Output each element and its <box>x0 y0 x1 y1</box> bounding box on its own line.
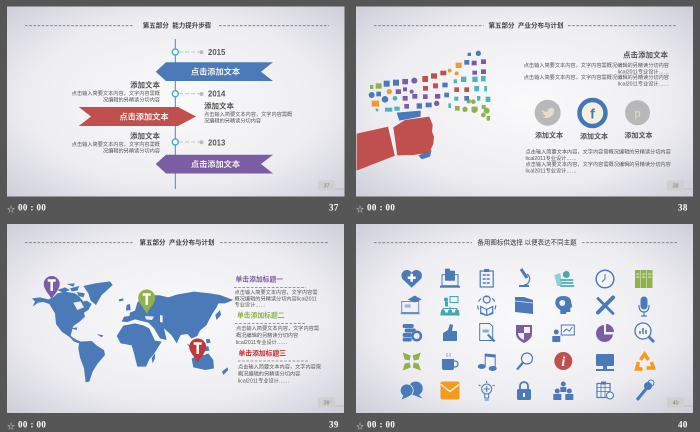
panel: slide 40 icons <box>356 224 693 413</box>
footer: slide 39: 00 : 00 <box>18 420 46 430</box>
footer: slide 37: 37 <box>329 202 339 212</box>
icon: graduation laptop <box>401 296 422 314</box>
social labels: 添加文本 <box>535 130 563 140</box>
footer: slide 39: ☆ <box>7 422 15 431</box>
icon: key <box>637 380 654 400</box>
footer: slide 38 <box>356 202 688 214</box>
social labels: 添加文本 <box>624 130 652 140</box>
text block: middle right: 况编辑的另精读分切内容 <box>204 116 261 124</box>
ribbon: purple <box>156 155 273 174</box>
text block: bottom right: 点击输入简要文本内容，文字内容需概况编辑的另精读分切内容 <box>526 160 671 168</box>
legend item one: 单击添加标题一 <box>236 274 283 284</box>
icon: magnifier <box>517 353 532 370</box>
icon: coins <box>403 324 422 342</box>
text block: upper left <box>72 80 160 104</box>
icon: heart <box>401 270 422 288</box>
map pin: green <box>138 290 155 314</box>
text block: middle right <box>204 100 292 124</box>
map pin: red <box>189 338 206 362</box>
legend item two: 点击输入简要文本内容，文字内容需 <box>236 324 319 332</box>
footer: slide 37: 00 : 00 <box>18 202 46 212</box>
legend item two: lical2011专业设计…… <box>236 338 287 346</box>
page number 37 <box>318 180 344 190</box>
year marker 2015: 2015 <box>208 48 226 57</box>
social labels <box>535 130 652 140</box>
text block: lower left: 添加文本 <box>130 130 160 140</box>
icon: pinterest circle: p <box>634 108 641 120</box>
icon: music note <box>478 354 497 371</box>
year marker 2014 <box>172 90 226 99</box>
icon: recycle <box>636 354 654 369</box>
ribbon: blue: 点击添加文本 <box>191 67 240 77</box>
text block: bottom right <box>526 148 671 174</box>
legend item three: 单击添加标题三 <box>238 348 286 358</box>
year marker 2014: 2014 <box>208 90 226 99</box>
text block: bottom right: lical2011专业设计…… <box>526 154 577 162</box>
page number 38 <box>667 180 693 190</box>
text block: lower left <box>72 130 160 154</box>
page number 37: 37 <box>323 184 330 190</box>
heading: slide 40: 备用图标供选择 以便表达不同主题 <box>477 238 577 246</box>
icon: mail <box>440 382 460 400</box>
text block: upper left: 添加文本 <box>130 80 160 90</box>
legend item one: 概况编辑的另精读分切内容lical2011 <box>234 294 317 302</box>
illustration: hand holding megaphone <box>357 111 434 171</box>
icon: monitor <box>596 354 614 371</box>
icon: org chart <box>440 296 460 316</box>
heading: slide 39: 第五部分 产业分布与计划 <box>139 238 215 246</box>
text block: middle right: 添加文本 <box>204 100 234 110</box>
icon: microphone <box>639 297 649 316</box>
world map <box>32 281 233 382</box>
timeline axis <box>174 39 176 189</box>
icon: folder <box>515 297 533 314</box>
page number 39 <box>318 398 344 408</box>
icon: clipboard <box>480 269 493 287</box>
icon: calendar <box>597 382 614 399</box>
text block: top right: 点击输入简要文本内容，文字内容需概况编辑的另精读分切内容 <box>524 73 669 81</box>
ribbon: red <box>79 107 196 126</box>
icon: tools <box>598 298 613 314</box>
footer: slide 40: 00 : 00 <box>367 420 395 430</box>
text block: top right: 点击输入简要文本内容，文字内容需概况编辑的另精读分切内容 <box>524 61 669 69</box>
icon: info <box>554 352 572 370</box>
ribbon: red: 点击添加文本 <box>119 112 169 122</box>
heading: slide 38: 第五部分 产业分布与计划 <box>488 20 564 30</box>
icon: info: i <box>561 355 565 370</box>
year marker 2013 <box>172 138 226 148</box>
footer: slide 40: ☆ <box>356 422 364 431</box>
icon: facebook circle: f <box>590 106 595 122</box>
icon: pinterest circle <box>625 100 650 125</box>
text block: upper left: 况编辑的另精读分切内容 <box>103 96 160 104</box>
legend item one: 点击输入简要文本内容，文字内容需 <box>234 288 318 296</box>
icon: clock <box>596 270 614 288</box>
text block: top right: 点击添加文本 <box>623 50 668 60</box>
text block: lower left: 点击输入简要文本内容，文字内容需概 <box>72 140 160 148</box>
text block: upper left: 点击输入简要文本内容，文字内容需概 <box>72 89 160 97</box>
footer: slide 38: 38 <box>678 202 688 212</box>
icon: chat bubbles <box>400 382 423 400</box>
ribbon: purple: 点击添加文本 <box>191 159 240 169</box>
footer: slide 38: 00 : 00 <box>367 202 395 212</box>
icon cloud from megaphone <box>369 51 490 121</box>
legend item two: 概况编辑的另精读分切内容 <box>236 331 298 339</box>
legend item two <box>235 310 319 346</box>
icon: head <box>555 296 572 314</box>
text block: bottom right: 点击输入简要文本内容，文字内容需概况编辑的另精读分切内容 <box>526 148 671 156</box>
icon: coffee cup <box>442 353 458 370</box>
icon: green arrows <box>403 352 421 370</box>
panel: slide 39 world map <box>7 224 344 413</box>
page number 40 <box>667 398 693 408</box>
icon: binders <box>635 270 652 288</box>
footer: slide 37: ☆ <box>7 205 15 214</box>
icon: people <box>553 382 573 400</box>
icon: books <box>554 271 574 286</box>
icon: pie chart <box>596 324 614 342</box>
footer: slide 39: 39 <box>329 420 339 430</box>
map pin: purple <box>44 276 60 299</box>
legend item three <box>238 348 321 384</box>
icon: laptop <box>440 269 460 288</box>
icon: thumbs up <box>443 324 457 341</box>
text block: lower left: 况编辑的另精读分切内容 <box>103 146 160 154</box>
footer: slide 40 <box>356 420 688 431</box>
panel: slide 38 megaphone <box>356 6 693 196</box>
legend item three: lical2011专业设计…… <box>238 376 289 384</box>
icon: document search <box>480 324 495 342</box>
page number 39: 39 <box>323 400 330 406</box>
footer: slide 39 <box>7 420 339 431</box>
icon: chart magnifier <box>635 323 654 342</box>
legend item one <box>234 274 318 308</box>
footer: slide 38: ☆ <box>356 205 364 214</box>
year marker 2013: 2013 <box>208 138 226 148</box>
text block: middle right: 点击输入简要文本内容，文字内容需概 <box>204 110 292 118</box>
icon: shield <box>516 325 532 343</box>
panel: slide 37 timeline <box>7 6 344 196</box>
icon: microscope <box>519 269 530 286</box>
legend item two: 单击添加标题二 <box>237 310 285 320</box>
legend item three: 概况编辑的另精读分切内容 <box>238 370 300 378</box>
legend item one: 专业设计…… <box>234 300 266 308</box>
page number 40: 40 <box>672 400 679 406</box>
social labels: 添加文本 <box>580 132 608 140</box>
legend item three: 点击输入简要文本内容，文字内容需 <box>238 362 321 370</box>
icon: light bulb <box>479 381 495 400</box>
heading: slide 37: 第五部分 能力提升步骤 <box>143 20 212 30</box>
text block: top right <box>524 50 669 88</box>
icon: presenter <box>552 325 574 342</box>
text block: bottom right: lical2011专业设计…… <box>526 166 577 174</box>
icon: twitter circle <box>535 100 561 126</box>
ribbon: blue <box>156 62 273 81</box>
page number 38: 38 <box>672 184 679 190</box>
footer: slide 37 <box>7 202 339 214</box>
icon: lock <box>517 382 531 400</box>
icon: reader <box>478 296 496 316</box>
year marker 2015 <box>172 48 226 57</box>
text block: top right: lical2011专业设计…… <box>618 80 669 88</box>
text block: top right: lical2011专业设计…… <box>618 68 669 76</box>
icon: facebook circle <box>580 100 606 126</box>
footer: slide 40: 40 <box>678 420 688 430</box>
